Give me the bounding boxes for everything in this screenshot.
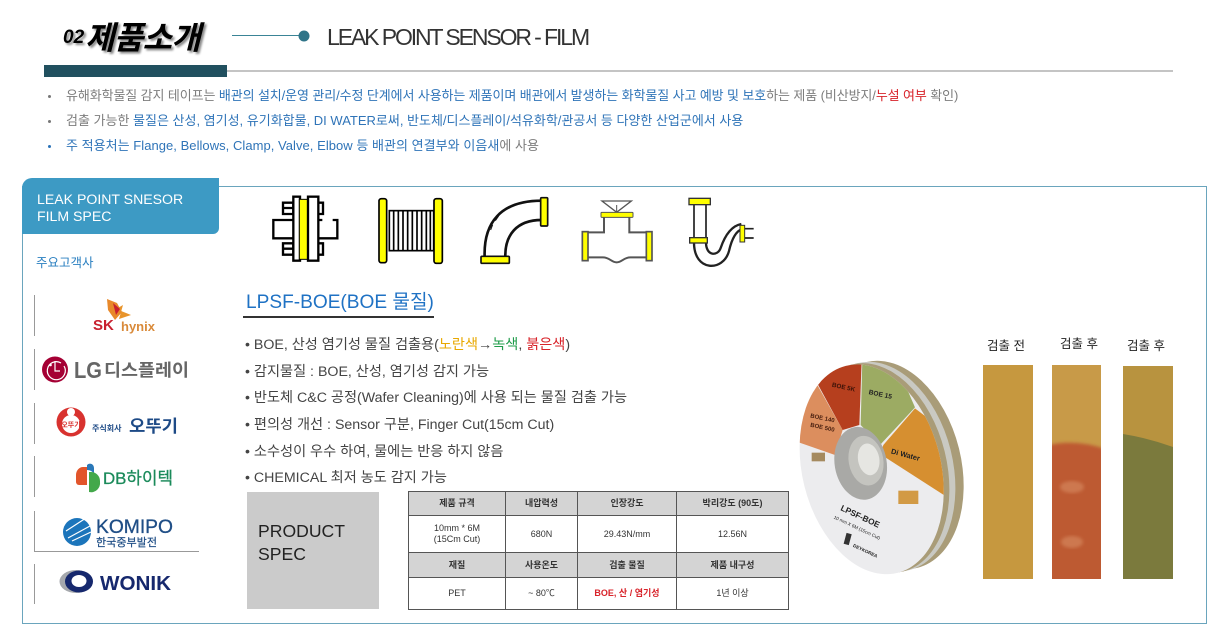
product heading: LPSF-BOE: LPSF-BOE(BOE 물질): [246, 292, 434, 313]
pipe fitting icons row: [272, 196, 754, 267]
icon: elbow: [481, 198, 548, 263]
logo: KOMIPO: 한국중부발전: [96, 536, 157, 549]
strip: after detection, red: [1052, 365, 1101, 579]
customer logos column: [34, 295, 199, 604]
logo: Ottogi: 주식회사: [92, 423, 122, 433]
product photo: sensor tape reel: BOE 5K: [831, 382, 856, 394]
logo: DB HiTek: DB하이텍: [103, 469, 173, 488]
logo: LG display: LG: [74, 357, 102, 383]
logo: Ottogi: 오뚜기: [61, 420, 81, 429]
spec table: 검출 물질: [609, 560, 645, 570]
logo: SK hynix: SK: [93, 317, 114, 334]
spec table: 제품 규격: [439, 498, 475, 508]
icon: bellows: [379, 199, 442, 263]
logo: LG display: 디스플레이: [104, 361, 189, 380]
logo: SK hynix: hynix: [121, 319, 156, 334]
description bullets: 검출 가능한 물질은 산성, 염기성, 유기화합물, DI WATER로써, 반도체/디스플레이/석유화학/관공서 등 다양한 산업군에서 사용: [66, 113, 743, 128]
sample strips: before and after detection: [983, 365, 1173, 579]
product spec box: PRODUCT: [258, 521, 345, 541]
description bullets: [48, 88, 958, 153]
logo: LG display: [42, 356, 189, 383]
spec table: 680N: [531, 528, 552, 538]
panel tab: spec heading: [22, 178, 219, 234]
strip labels: [987, 337, 1165, 353]
strip: after detection, green: [1123, 366, 1173, 579]
logo: KOMIPO: KOMIPO: [96, 517, 173, 538]
spec table: 내압력성: [525, 498, 558, 508]
feature list: • 편의성 개선 : Sensor 구분, Finger Cut(15cm Cut): [245, 417, 554, 433]
panel tab: spec heading: LEAK POINT SNESOR: [37, 191, 183, 207]
description bullets: 주 적용처는 Flange, Bellows, Clamp, Valve, Elbow 등 배관의 연결부와 이음새에 사용: [66, 138, 539, 153]
logo: WONIK: [60, 570, 172, 595]
product photo: sensor tape reel: [800, 360, 964, 574]
strip: before detection: [983, 365, 1033, 579]
spec table: 인장강도: [610, 498, 644, 508]
logo: WONIK: WONIK: [100, 573, 172, 595]
feature list: • BOE, 산성 염기성 물질 검출용(노란색→녹색, 붉은색): [245, 337, 570, 353]
spec table: ~ 80℃: [528, 588, 555, 598]
customers label: 주요고객사: [36, 256, 94, 270]
logo: Ottogi: [56, 408, 178, 436]
spec table: 박리강도 (90도): [703, 498, 762, 508]
feature list: • 감지물질 : BOE, 산성, 염기성 감지 가능: [245, 364, 489, 380]
spec table: BOE, 산 / 염기성: [594, 588, 660, 598]
icon: trap: [689, 198, 754, 266]
logo: Ottogi: 오뚜기: [129, 417, 178, 436]
panel tab: spec heading: FILM SPEC: [37, 208, 111, 224]
spec table: 1년 이상: [716, 588, 749, 598]
feature list: • 반도체 C&C 공정(Wafer Cleaning)에 사용 되는 물질 검출 가능: [245, 390, 627, 406]
product photo: sensor tape reel: 10 mm X 6M (15cm Cut): [833, 515, 881, 541]
strip labels: 검출 전: [987, 339, 1025, 353]
spec table: PET: [448, 588, 466, 598]
spec table: 12.56N: [718, 528, 747, 538]
product spec box: SPEC: [258, 544, 306, 564]
strip labels: 검출 후: [1127, 339, 1165, 353]
feature list: [245, 336, 627, 486]
section title: 02 제품소개: 02제품소개: [63, 20, 200, 56]
header rule: [44, 65, 1173, 77]
description bullets: 유해화학물질 감지 테이프는 배관의 설치/운영 관리/수정 단계에서 사용하는 제품이며 배관에서 발생하는 화학물질 사고 예방 및 보호하는 제품 (비산방지/누설 여부 확인): [66, 88, 958, 103]
strip labels: 검출 후: [1060, 337, 1098, 351]
logo: DB HiTek: [76, 464, 173, 492]
product photo: sensor tape reel: BOE 15: [868, 389, 893, 401]
product photo: sensor tape reel: BOE 500: [810, 423, 836, 434]
feature list: • CHEMICAL 최저 농도 감지 가능: [245, 470, 447, 486]
spec table: 재질: [449, 560, 465, 570]
main panel frame: [22, 186, 1207, 624]
icon: valve: [582, 201, 652, 262]
spec table: (15Cm Cut): [434, 534, 480, 544]
product spec box: [247, 492, 379, 609]
product photo: sensor tape reel: LPSF-BOE: [839, 503, 882, 530]
connector line and dot: [232, 30, 310, 42]
spec table: 10mm * 6M: [434, 523, 480, 533]
logo: KOMIPO: [63, 517, 173, 549]
spec table: 제품 내구성: [711, 560, 754, 570]
product photo: sensor tape reel: DEYKOREA: [852, 543, 879, 559]
product photo: sensor tape reel: BOE 140: [810, 413, 836, 425]
feature list: • 소수성이 우수 하여, 물에는 반응 하지 않음: [245, 444, 503, 460]
spec table: [408, 491, 789, 610]
spec table: 사용온도: [525, 560, 558, 570]
subtitle: LEAK POINT SENSOR - FILM: LEAK POINT SENSOR - FILM: [327, 24, 588, 50]
icon: flange: [273, 197, 337, 261]
spec table: 29.43N/mm: [604, 528, 650, 538]
logo: SK hynix: [93, 299, 156, 334]
product photo: sensor tape reel: Di Water: [890, 447, 921, 463]
